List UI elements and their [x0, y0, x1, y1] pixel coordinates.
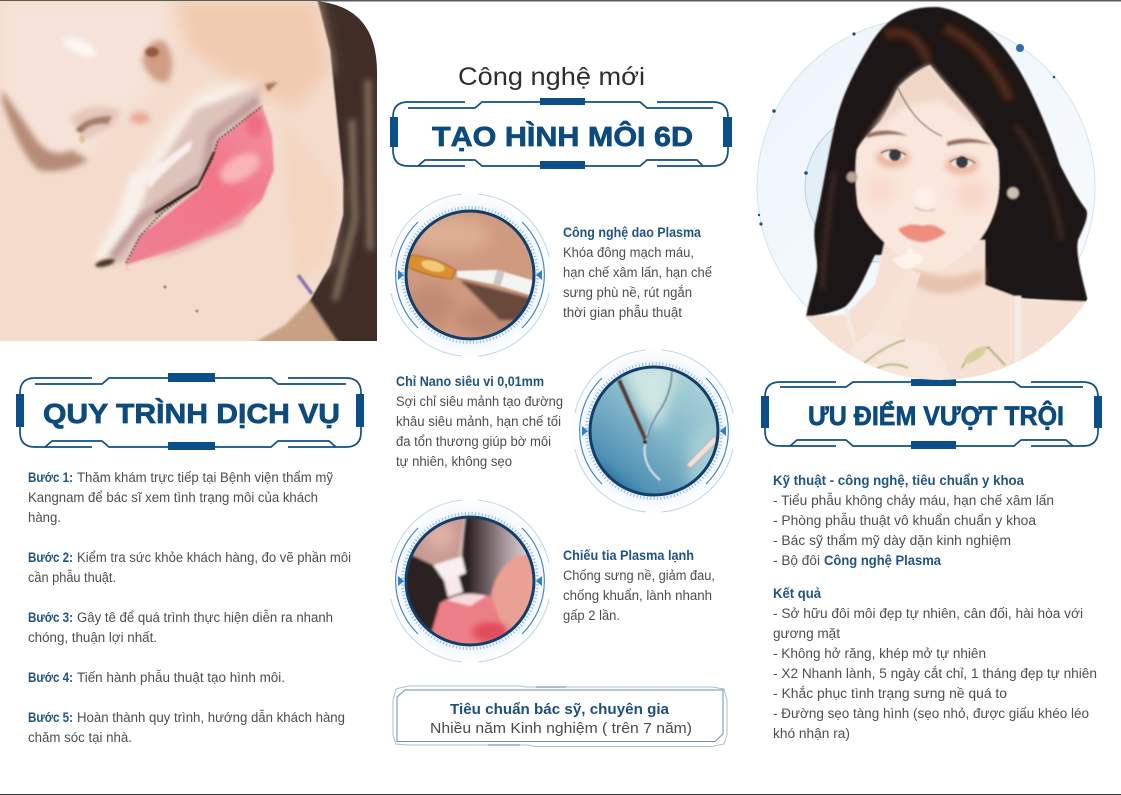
- text: Công nghệ dao Plasma: thời gian phẫu thuật: [563, 305, 682, 320]
- eyes: [876, 148, 910, 168]
- nose: [915, 189, 935, 207]
- face: [856, 65, 999, 271]
- text: Chỉ Nano siêu vi: [396, 374, 563, 469]
- text: technical advantages: Kỹ thuật - công nghệ, tiêu chuẩn y khoa: [773, 473, 1025, 488]
- text: service steps: Kangnam để bác sĩ xem tình trạng môi của khách: [28, 490, 318, 505]
- callout box: doctor standards: [393, 686, 727, 746]
- text: Chiếu tia Plasma lạnh: gấp 2 lần.: [563, 608, 620, 623]
- nose: [4, 5, 166, 150]
- text: technical advantages: - Tiểu phẫu không chảy máu, hạn chế xâm lấn: [773, 493, 1054, 508]
- straps: [1015, 296, 1021, 365]
- circle image: plasma knife: [390, 194, 550, 356]
- title frame: Ưu điểm vượt trội: [761, 379, 1102, 449]
- text: results: - Sở hữu đôi môi đẹp tự nhiên, cân đối, hài hòa với: [773, 606, 1083, 621]
- title frame: Tạo hình môi 6D: [390, 98, 732, 169]
- shoulders and neck: [805, 238, 1087, 380]
- text: service steps: Kiểm tra sức khỏe khách hàng, đo vẽ phần môi: [77, 550, 351, 565]
- text: service steps: Bước 3:: [28, 610, 73, 625]
- text: results: khó nhận ra): [773, 726, 850, 741]
- portrait photo: woman with flower: [804, 6, 1088, 380]
- numbing cream patch: [108, 76, 256, 230]
- text: service steps: chăm sóc tại nhà.: [28, 730, 132, 745]
- earrings: [846, 172, 858, 182]
- text: service steps: Bước 5:: [28, 710, 73, 725]
- text: results: - Đường sẹo tàng hình (sẹo nhỏ, được giấu khéo léo: [773, 706, 1089, 721]
- text: Công nghệ dao Plasma: Công nghệ dao Plasma: [563, 225, 702, 240]
- callout box: doctor standards: Tiêu chuẩn bác sỹ, chuyên gia: [450, 701, 670, 718]
- circle image: nano thread: [574, 350, 734, 512]
- hair: [806, 7, 1088, 317]
- sprigs: [862, 340, 908, 370]
- text: service steps: Bước 2:: [28, 550, 73, 565]
- text: service steps: cần phẫu thuật.: [28, 570, 116, 585]
- title frame: Ưu điểm vượt trội: ƯU ĐIỂM VƯỢT TRỘI: [808, 400, 1064, 431]
- text: Công nghệ dao Plasma: hạn chế xâm lấn, hạn chế: [563, 265, 713, 280]
- suture line: [126, 106, 262, 263]
- title frame: Quy trình dịch vụ: QUY TRÌNH DỊCH VỤ: [43, 398, 340, 429]
- text: service steps: Tiến hành phẫu thuật tạo hình môi.: [77, 670, 285, 685]
- text: service steps: Bước 1:: [28, 470, 73, 485]
- text: service steps: chóng, thuận lợi nhất.: [28, 630, 157, 645]
- brows: [867, 130, 908, 138]
- lips: [898, 225, 946, 242]
- finger and flower: [912, 272, 921, 288]
- text: technical advantages: [773, 473, 1054, 568]
- upper lip: [114, 86, 264, 264]
- hair beside the face: [308, 1, 377, 341]
- text: service steps: hàng.: [28, 510, 61, 525]
- title frame: Tạo hình môi 6D: TẠO HÌNH MÔI 6D: [432, 120, 693, 152]
- text: Chiếu tia Plasma lạnh: chống khuẩn, lành nhanh: [563, 588, 712, 603]
- text: Công nghệ dao Plasma: sưng phù nề, rút ngắn: [563, 285, 692, 300]
- portrait background circle: [757, 18, 1095, 356]
- text: service steps: Gây tê để quá trình thực hiện diễn ra nhanh: [77, 610, 333, 625]
- text: results: - Không hở răng, khép mở tự nhiên: [773, 646, 986, 661]
- text: technical advantages: - Phòng phẫu thuật vô khuẩn chuẩn y khoa: [773, 513, 1037, 528]
- text: Công nghệ dao Plasma: Khóa đông mạch máu,: [563, 245, 694, 260]
- text: technical advantages: Công nghệ Plasma: [824, 553, 942, 568]
- marker pen and specks: [298, 275, 312, 294]
- text: service steps: Bước 4:: [28, 670, 73, 685]
- text: Chiếu tia Plasma lạnh: [563, 548, 715, 623]
- photo: stitched lips after surgery: [0, 0, 390, 350]
- heading: Công nghệ mới: Công nghệ mới: [458, 63, 645, 91]
- text: service steps: Thăm khám trực tiếp tại Bệnh viện thẩm mỹ: [77, 470, 333, 485]
- text: service steps: [28, 470, 351, 745]
- text: Chỉ Nano siêu vi: Sợi chỉ siêu mảnh tạo đường: [396, 394, 563, 409]
- text: results: - Khắc phục tình trạng sưng nề quá to: [773, 686, 1007, 701]
- text: Chiếu tia Plasma lạnh: Chiếu tia Plasma lạnh: [563, 548, 694, 563]
- text: Chiếu tia Plasma lạnh: Chống sưng nề, giảm đau,: [563, 568, 715, 583]
- title frame: Quy trình dịch vụ: [16, 373, 364, 450]
- text: technical advantages: - Bác sỹ thẩm mỹ dày dặn kinh nghiệm: [773, 533, 1011, 548]
- text: service steps: Hoàn thành quy trình, hướng dẫn khách hàng: [77, 710, 345, 725]
- text: Chỉ Nano siêu vi: tự nhiên, không sẹo: [396, 454, 512, 469]
- text: results: gương mặt: [773, 626, 840, 641]
- text: results: [773, 586, 1097, 741]
- text: results: - X2 Nhanh lành, 5 ngày cắt chỉ, 1 tháng đẹp tự nhiên: [773, 666, 1097, 681]
- text: technical advantages: - Bộ đôi: [773, 553, 820, 568]
- text: results: Kết quả: [773, 586, 822, 601]
- text: Chỉ Nano siêu vi: đa tổn thương giúp bờ môi: [396, 434, 551, 449]
- text: Chỉ Nano siêu vi: Chỉ Nano siêu vi 0,01mm: [396, 374, 544, 389]
- text: Chỉ Nano siêu vi: khâu siêu mảnh, hạn chế tối: [396, 414, 561, 429]
- text: Công nghệ dao Plasma: [563, 225, 713, 320]
- lower lip: [126, 106, 274, 265]
- circle image: cold plasma: [390, 500, 550, 662]
- callout box: doctor standards: Nhiều năm Kinh nghiệm ( trên 7 năm): [430, 720, 692, 737]
